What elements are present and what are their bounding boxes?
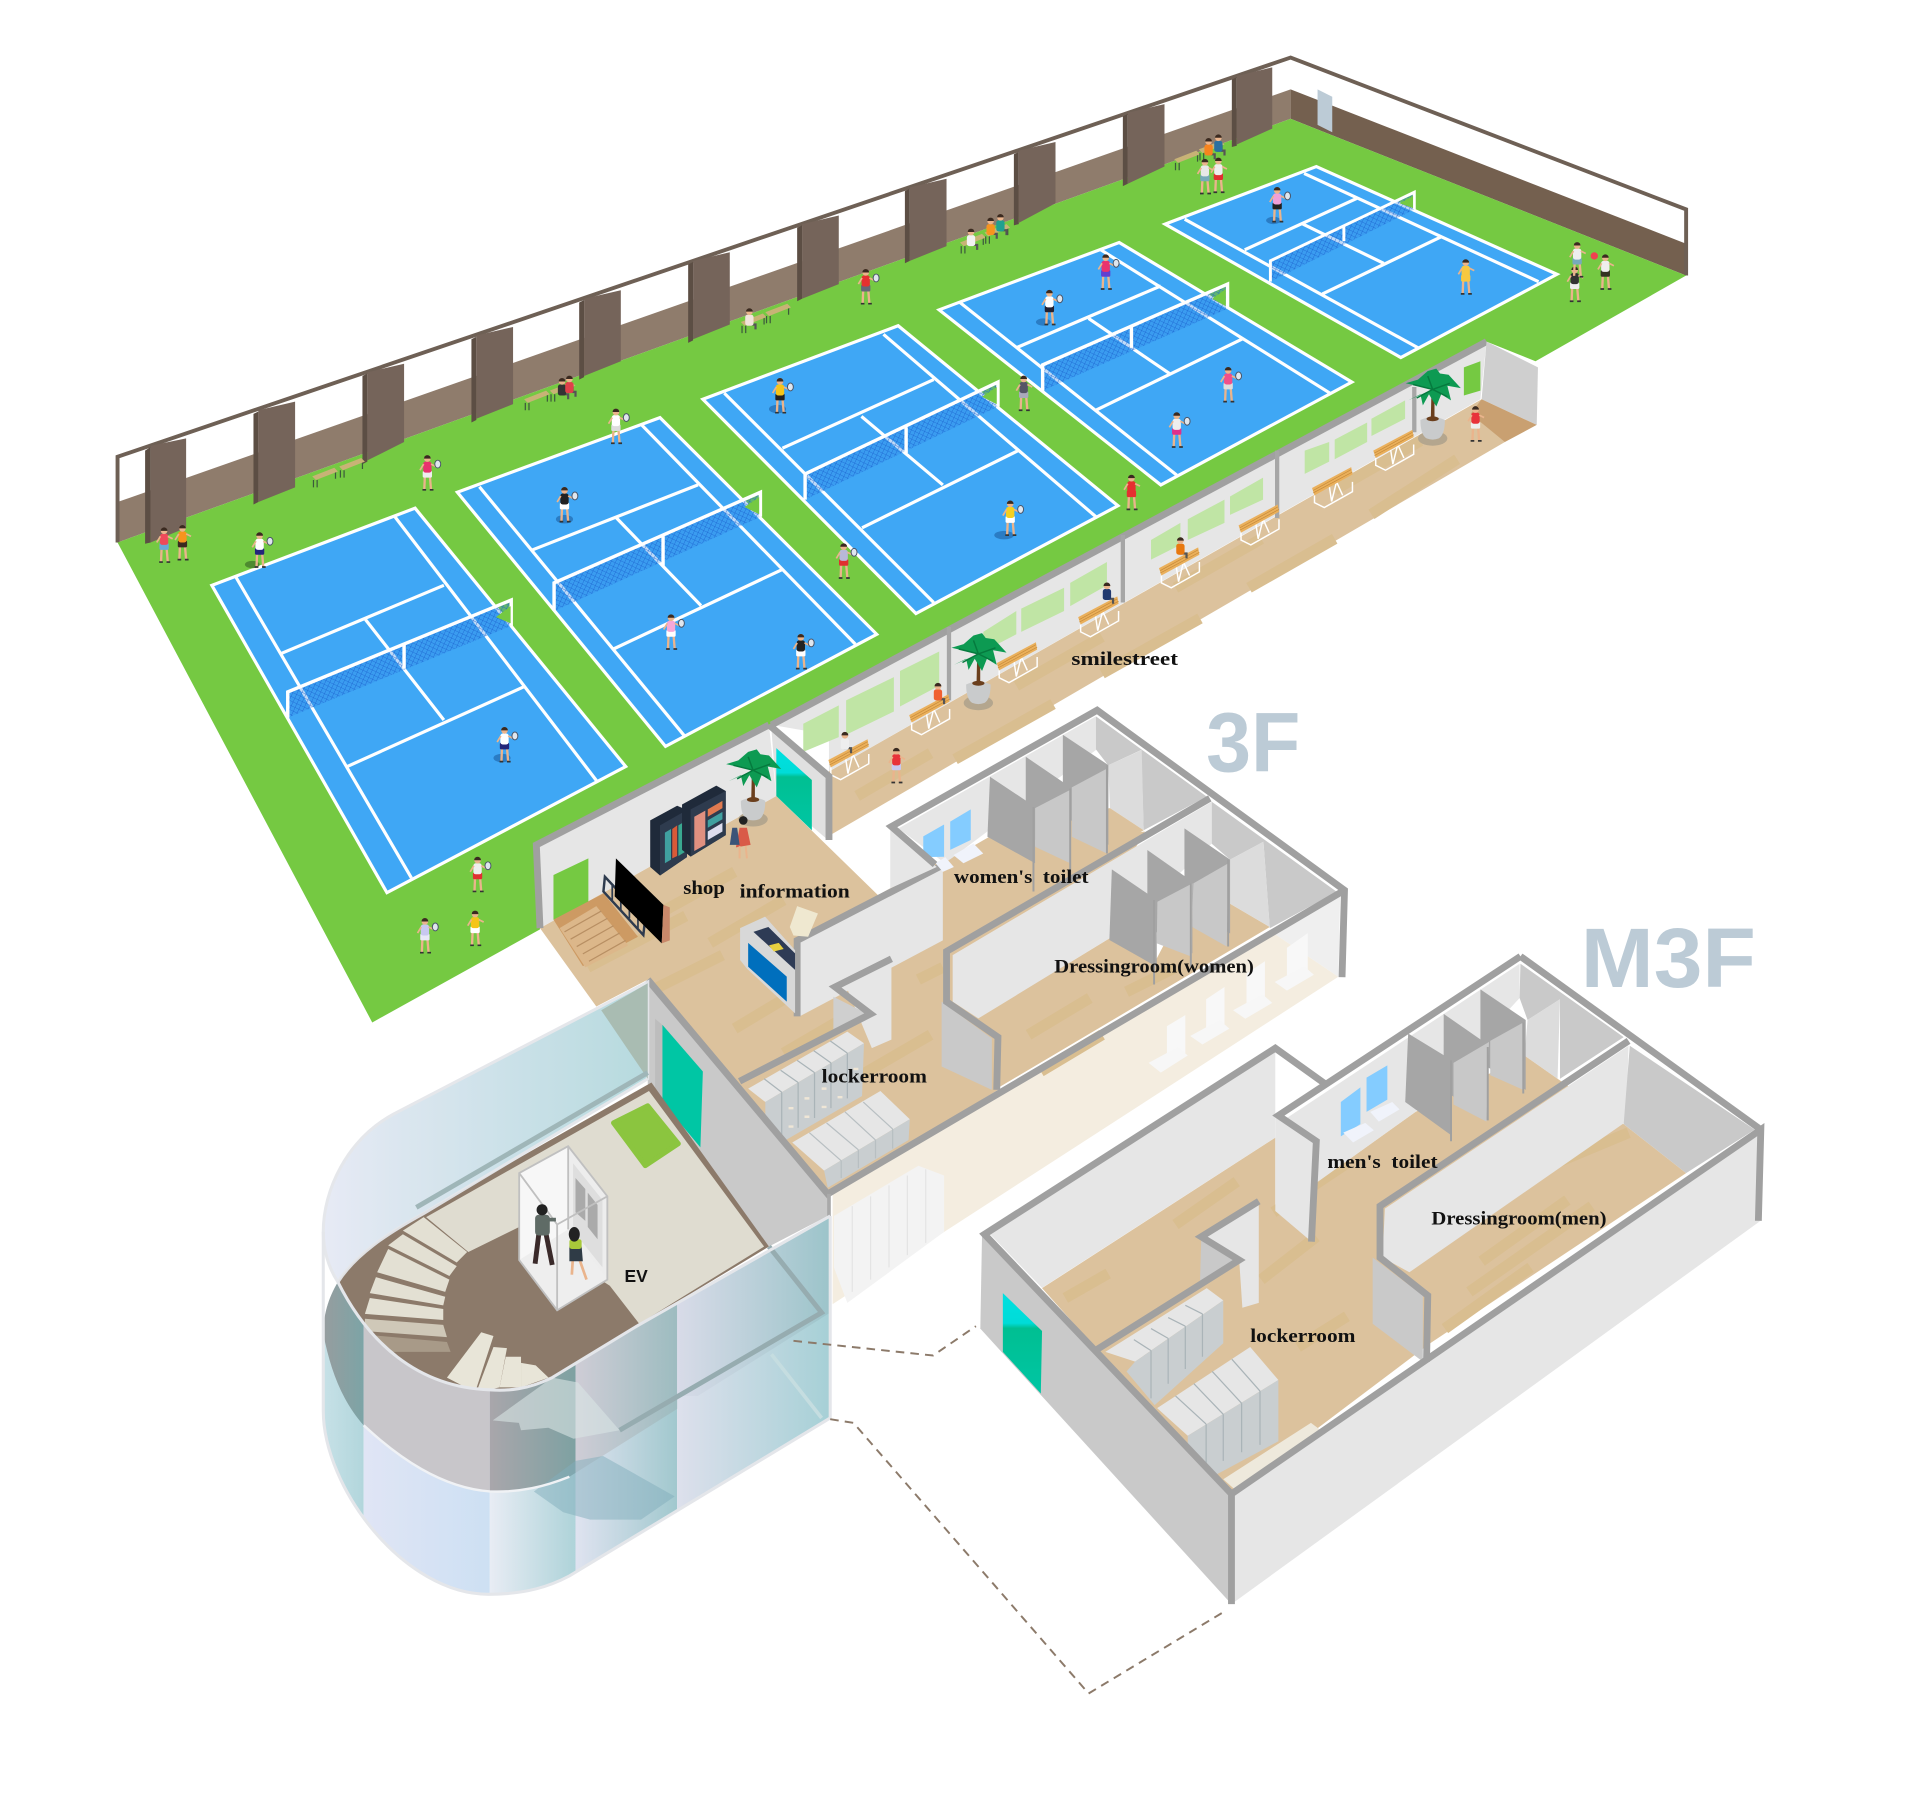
group right <box>1567 267 1583 301</box>
players and spectators <box>157 134 1614 953</box>
person: man at elevator <box>535 1204 556 1265</box>
player white navy <box>252 532 273 567</box>
faded lockers <box>834 1166 944 1303</box>
player court 2 black <box>793 634 814 669</box>
M3F toilet right <box>1520 964 1624 1079</box>
end room wall <box>1482 342 1538 425</box>
shop door <box>776 748 812 830</box>
seated top <box>1204 138 1215 159</box>
M3F floor <box>1042 1056 1686 1494</box>
info wall <box>797 865 944 1016</box>
M3F T wall <box>1201 1201 1259 1308</box>
M3F lockers row 2 <box>1157 1347 1278 1477</box>
corridor palms <box>951 369 1461 710</box>
player court 3 yellow <box>773 378 793 413</box>
corridor back wall <box>771 342 1487 771</box>
slab line <box>620 1247 822 1430</box>
M3F floor planks <box>1065 1133 1629 1347</box>
seated trio <box>996 214 1007 235</box>
EV hall beige floor <box>426 1091 764 1324</box>
court 3 <box>703 326 1118 613</box>
player red side <box>1124 475 1140 509</box>
group right <box>1598 254 1614 289</box>
door on side wall <box>1318 89 1332 132</box>
end green door <box>1464 361 1480 396</box>
player lower <box>468 911 484 945</box>
women's dressing partitions <box>1109 828 1230 985</box>
back glass <box>323 982 648 1282</box>
glass over floor <box>601 983 648 1079</box>
lockers row 2 <box>792 1091 910 1188</box>
faded sinks <box>1149 933 1314 1073</box>
standing pair <box>1211 158 1227 192</box>
women's dressing room floor <box>978 904 1270 1089</box>
women's toilet wall <box>890 716 1207 888</box>
front glass <box>324 1284 829 1593</box>
M3F toilet partitions <box>1405 989 1526 1141</box>
label: lockerroom M3F: lockerroom <box>1250 1326 1356 1347</box>
player court 4 near <box>1169 412 1190 447</box>
3F wall tops <box>648 710 1344 1194</box>
lockers row 1 <box>748 1032 864 1141</box>
label: EV: EV <box>624 1266 648 1286</box>
label: smilestreet: smilestreet <box>1071 649 1179 670</box>
wall rail <box>118 58 1686 542</box>
person: woman at elevator <box>569 1227 587 1280</box>
label: women's toilet: women's toilet <box>954 867 1089 888</box>
player court 4 purple <box>1098 254 1119 289</box>
M3F front wall <box>1231 1130 1761 1604</box>
end landing <box>1471 399 1537 442</box>
pillars <box>145 67 1272 544</box>
toilet partitions <box>987 735 1108 891</box>
back wall lower panel <box>118 89 1291 542</box>
upper staircase <box>365 1217 467 1352</box>
lockerroom front wall post <box>827 1194 830 1273</box>
label: men's toilet: men's toilet <box>1327 1152 1438 1173</box>
grass benches <box>312 141 1224 487</box>
shop green door <box>553 858 588 920</box>
capsule outline <box>323 1216 830 1594</box>
corridor benches <box>828 430 1414 780</box>
corridor people <box>841 406 1484 782</box>
label: shop: shop <box>683 878 725 899</box>
label: Dressingroom(men): Dressingroom(men) <box>1431 1209 1607 1230</box>
court 2 <box>457 418 877 746</box>
player court 2 pink <box>664 614 684 649</box>
player court 4 pink <box>1221 367 1242 402</box>
M3F building <box>980 956 1761 1604</box>
dressing room floor planks <box>1029 967 1176 1071</box>
court 4 <box>939 242 1352 485</box>
grass field <box>118 119 1686 1022</box>
spectators near left wall <box>157 527 173 562</box>
label: Dressingroom(women): Dressingroom(women) <box>1054 956 1254 977</box>
label: information: information <box>740 882 850 903</box>
elevator cab <box>519 1146 607 1310</box>
shopper with child <box>730 816 751 858</box>
display board and rack <box>603 858 670 943</box>
entrance mat <box>553 893 638 967</box>
player gray <box>836 543 857 578</box>
faded front floor <box>833 933 1338 1304</box>
player gray court side <box>1016 376 1032 410</box>
seated person <box>745 308 756 329</box>
seated pair <box>558 378 568 399</box>
M3F lockers row 1 <box>1105 1288 1223 1405</box>
lower slab line <box>771 1354 822 1418</box>
red ball <box>1591 252 1598 260</box>
shop right wall <box>769 725 829 840</box>
M3F wall tops <box>984 1048 1325 1604</box>
lower staircase <box>447 1332 549 1392</box>
label: lockerroom 3F: lockerroom <box>822 1066 927 1087</box>
clothing cabinets <box>650 786 726 876</box>
slab curve <box>364 1425 569 1492</box>
player court 5 yellow <box>1458 259 1474 294</box>
information counter <box>740 906 818 1013</box>
group right <box>1570 242 1586 277</box>
M3F dressing wall <box>1382 1046 1629 1272</box>
toilet mirrors and sinks <box>923 809 983 872</box>
EV hall floor base <box>338 1082 769 1390</box>
court 5 <box>1165 167 1557 358</box>
player court 1 <box>497 727 518 762</box>
player court 4 white <box>1042 290 1063 325</box>
back glass band <box>416 1073 648 1207</box>
player lower <box>418 918 438 953</box>
court 1 <box>212 508 626 893</box>
standing pair <box>1198 159 1213 193</box>
stairs seen through glass <box>493 1378 620 1439</box>
M3F bench strip <box>1223 1423 1321 1489</box>
M3F toilet back <box>1283 964 1520 1183</box>
player court 3 near <box>1003 500 1024 535</box>
M3F dressing inner post <box>1373 1258 1423 1362</box>
women's toilet floor <box>943 808 1144 949</box>
spectator orange <box>175 525 191 560</box>
player red <box>858 269 879 304</box>
corridor windows <box>803 400 1405 752</box>
green mat <box>613 1106 678 1166</box>
dressing wall end <box>942 1002 992 1090</box>
seated top <box>1214 134 1224 156</box>
dashed connector upper <box>793 1326 976 1356</box>
M3F dressing right wall <box>1624 1046 1755 1173</box>
dashed connector lower <box>830 1419 1224 1693</box>
heading: M3F: M3F <box>1581 911 1756 1005</box>
women's dressing room walls <box>953 802 1337 1018</box>
shop back wall <box>536 725 776 928</box>
player pink <box>420 455 441 490</box>
player lower <box>470 857 491 891</box>
corridor floor: smile street <box>829 399 1505 835</box>
seated trio <box>967 229 977 250</box>
small wall by lockers <box>833 964 891 1048</box>
EV door <box>662 1025 703 1147</box>
M3F door <box>1003 1293 1042 1393</box>
player court 5 pink <box>1270 187 1290 222</box>
M3F left upper wall <box>990 1051 1275 1288</box>
lower stair shadow <box>534 1456 675 1520</box>
3F main floor <box>540 796 1145 1194</box>
player white <box>609 409 629 443</box>
EV door frame <box>655 1019 662 1102</box>
M3F mirrors and sinks <box>1341 1065 1400 1142</box>
M3F left outer wall <box>980 1234 1231 1604</box>
heading: 3F: 3F <box>1206 695 1300 789</box>
M3F stub wall <box>1275 1117 1316 1242</box>
EV side wall <box>648 980 828 1247</box>
seated trio <box>986 218 997 239</box>
seated pair <box>565 376 576 397</box>
palm in shop <box>726 749 781 827</box>
faded right wall <box>1273 896 1340 977</box>
side wall <box>1291 89 1686 276</box>
player court 2 far <box>557 487 578 522</box>
upper glass band <box>324 1219 828 1490</box>
